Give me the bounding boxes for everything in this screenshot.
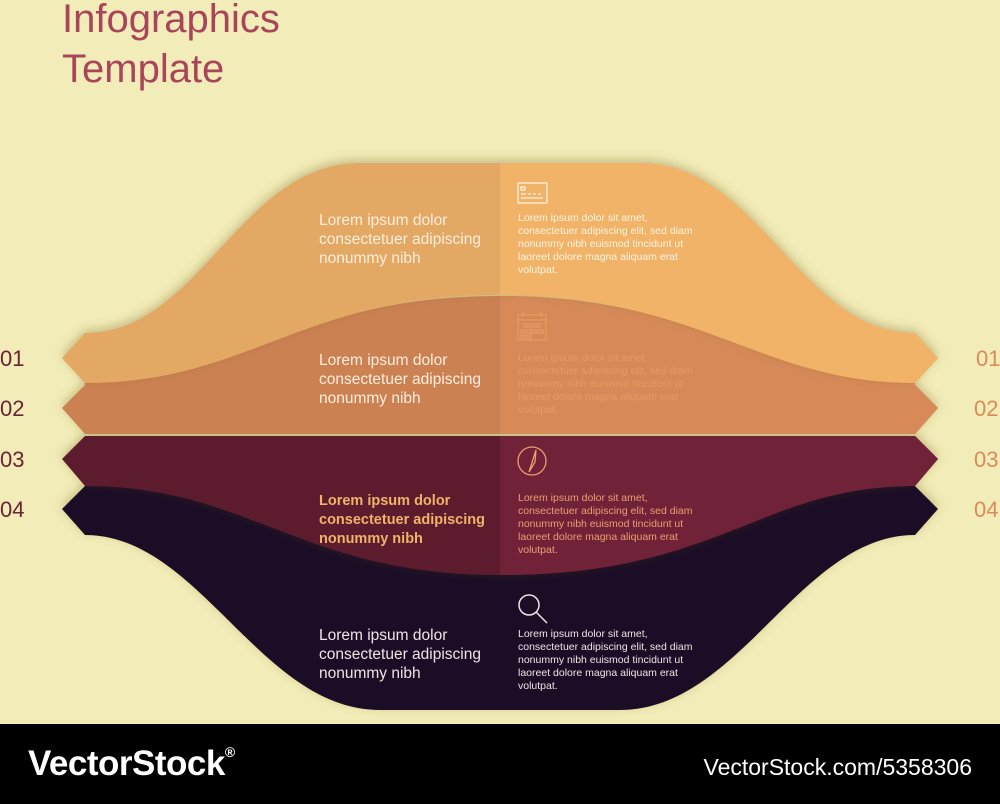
left text blocks: nonummy nibh: [319, 665, 421, 682]
left text blocks: [319, 212, 485, 682]
title: Template: [62, 47, 224, 91]
left numbers: 01: [0, 346, 24, 371]
right text block 3: nonummy nibh euismod tincidunt ut: [518, 518, 683, 530]
right text block 3: [518, 492, 693, 556]
left text blocks: nonummy nibh: [319, 390, 421, 407]
left numbers: 03: [0, 447, 24, 472]
left text blocks: Lorem ipsum dolor: [319, 212, 447, 229]
band 2: [62, 296, 938, 434]
left text blocks: consectetuer adipiscing: [319, 371, 481, 388]
right text block 3: consectetuer adipiscing elit, sed diam: [518, 505, 693, 517]
right text block 3: Lorem ipsum dolor sit amet,: [518, 492, 648, 504]
icon: magnifier: [519, 595, 547, 623]
footer logo: VectorStock®: [28, 744, 235, 783]
right text block 1: laoreet dolore magna aliquam erat: [518, 251, 678, 263]
left text blocks: nonummy nibh: [319, 531, 423, 547]
band 4: [62, 486, 938, 710]
left numbers: [0, 346, 24, 522]
right text block 1: Lorem ipsum dolor sit amet,: [518, 212, 648, 224]
right text block 4: nonummy nibh euismod tincidunt ut: [518, 654, 683, 666]
band 3: [62, 436, 938, 575]
icon: card: [518, 183, 547, 203]
right text block 3: laoreet dolore magna aliquam erat: [518, 531, 678, 543]
right text block 1: [518, 212, 693, 276]
right numbers: 01: [976, 346, 1000, 371]
right text block 4: laoreet dolore magna aliquam erat: [518, 667, 678, 679]
right text block 2: Lorem ipsum dolor sit amet,: [518, 352, 648, 364]
right numbers: 03: [974, 447, 998, 472]
right text block 4: Lorem ipsum dolor sit amet,: [518, 628, 648, 640]
right numbers: [974, 346, 1000, 522]
icon: compass: [518, 447, 546, 475]
right text block 1: consectetuer adipiscing elit, sed diam: [518, 225, 693, 237]
left text blocks: consectetuer adipiscing: [319, 231, 481, 248]
right numbers: 02: [974, 396, 998, 421]
right text block 4: consectetuer adipiscing elit, sed diam: [518, 641, 693, 653]
footer url: VectorStock.com/5358306: [704, 754, 972, 780]
left text blocks: consectetuer adipiscing: [319, 512, 485, 528]
footer bar: [0, 724, 1000, 804]
right text block 4: [518, 628, 693, 692]
right text block 2: nonummy nibh euismod tincidunt ut: [518, 378, 683, 390]
right numbers: 04: [974, 497, 998, 522]
right text block 1: nonummy nibh euismod tincidunt ut: [518, 238, 683, 250]
left text blocks: consectetuer adipiscing: [319, 646, 481, 663]
right text block 2: laoreet dolore magna aliquam erat: [518, 391, 678, 403]
left text blocks: Lorem ipsum dolor: [319, 352, 447, 369]
right text block 2: consectetuer adipiscing elit, sed diam: [518, 365, 693, 377]
band 1: [62, 163, 938, 383]
left numbers: 04: [0, 497, 24, 522]
left text blocks: Lorem ipsum dolor: [319, 627, 447, 644]
right text block 2: [518, 352, 693, 416]
left numbers: 02: [0, 396, 24, 421]
title: [62, 0, 280, 91]
right text block 4: volutpat.: [518, 680, 558, 692]
left text blocks: nonummy nibh: [319, 250, 421, 267]
icon: calendar: [518, 312, 546, 340]
right text block 3: volutpat.: [518, 544, 558, 556]
left text blocks: Lorem ipsum dolor: [319, 493, 451, 509]
right text block 1: volutpat.: [518, 264, 558, 276]
right text block 2: volutpat.: [518, 404, 558, 416]
